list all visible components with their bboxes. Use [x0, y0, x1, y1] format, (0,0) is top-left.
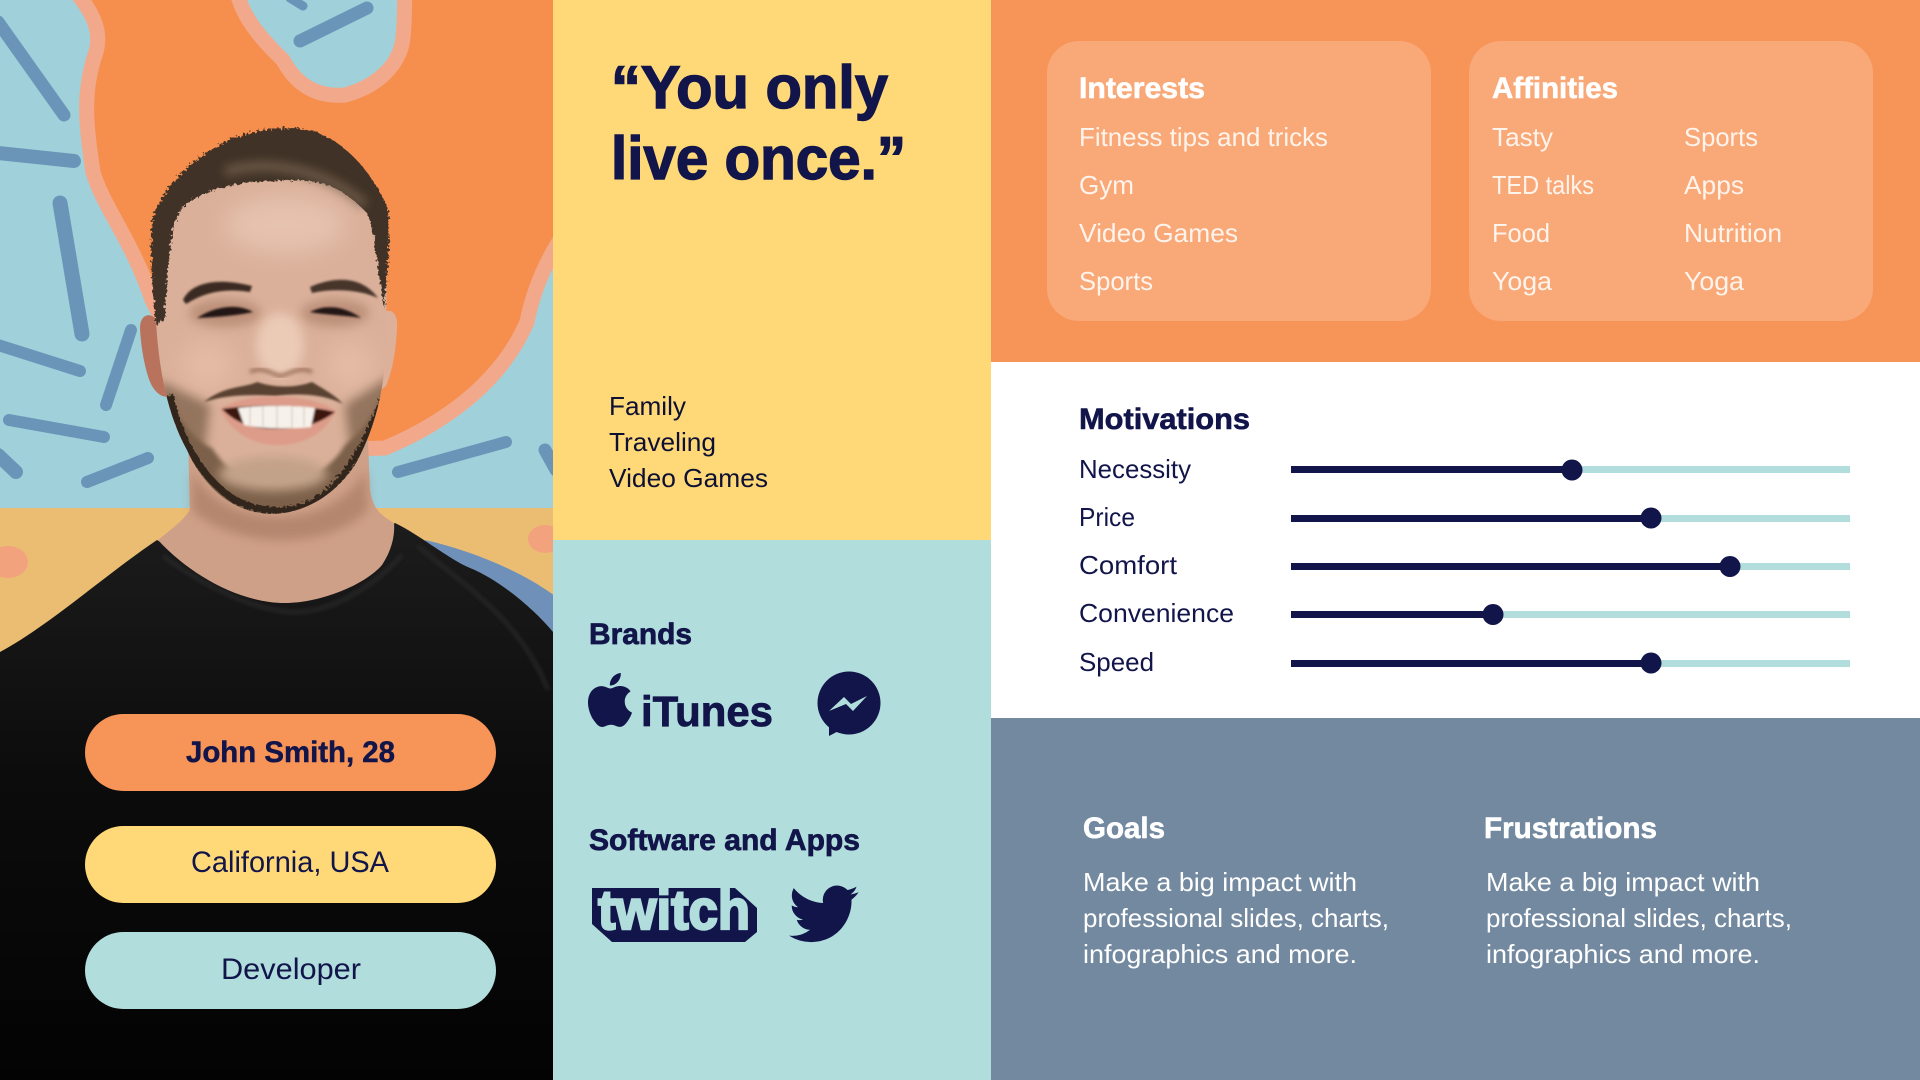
nose: [250, 313, 312, 377]
affinities list: Sports: [1684, 122, 1758, 152]
interests list: [1079, 122, 1328, 296]
interests list: Fitness tips and tricks: [1079, 122, 1328, 152]
interests list: Video Games: [1079, 218, 1238, 248]
hair light: [225, 166, 365, 205]
blue painted sticks: [0, 0, 556, 482]
quote heading: live once.”: [611, 125, 906, 192]
heading: affinities: Affinities: [1492, 72, 1618, 105]
affinities list: Apps: [1684, 170, 1744, 200]
heading: brands: Brands: [589, 618, 692, 651]
sand floor band: [0, 508, 553, 652]
blob cut-out: [237, 0, 405, 95]
slider: necessity: [1079, 454, 1850, 484]
heading: software and apps: Software and Apps: [589, 824, 860, 857]
frustrations text: infographics and more.: [1486, 939, 1760, 969]
pill: location: [85, 826, 496, 903]
panel: portrait photo: [0, 0, 565, 1080]
forehead light: [225, 197, 345, 253]
pink floor spots: [0, 525, 562, 578]
neck shadow: [192, 470, 368, 540]
heading: goals: Goals: [1083, 812, 1165, 845]
slider: price: [1079, 502, 1850, 532]
beard: [167, 398, 380, 514]
mustache: [204, 382, 343, 404]
neck: [158, 440, 394, 603]
affinities list: Tasty: [1492, 122, 1553, 152]
slider: speed: Speed: [1079, 647, 1154, 677]
eye left: [197, 307, 253, 318]
eyebrow left: [183, 282, 252, 304]
panel: motivations: [991, 362, 1920, 718]
frustrations text: professional slides, charts,: [1486, 903, 1792, 933]
pill: name: [85, 714, 496, 791]
hobbies list: Traveling: [609, 427, 716, 457]
heading: motivations: Motivations: [1079, 403, 1250, 436]
orange painted blob: [76, 0, 565, 450]
wall background: [0, 0, 553, 510]
slider: convenience: Convenience: [1079, 598, 1234, 628]
panel: affinities card: [1469, 41, 1873, 321]
face: [154, 179, 386, 468]
left ear: [140, 315, 166, 397]
panel: brands and apps: [553, 540, 991, 1080]
hobbies list: Video Games: [609, 463, 768, 493]
hobbies list: Family: [609, 391, 686, 421]
panel: goals and frustrations: [991, 718, 1920, 1080]
panel: interests card: [1047, 41, 1431, 321]
slider: comfort: Comfort: [1079, 550, 1178, 580]
pill: name: John Smith, 28: [186, 736, 395, 769]
pill: job: Developer: [221, 953, 361, 986]
goals text: infographics and more.: [1083, 939, 1357, 969]
eye sockets: [189, 299, 369, 327]
pill: location: California, USA: [191, 846, 389, 879]
icon: itunes logo: iTunes: [641, 688, 773, 736]
slider: price: Price: [1079, 502, 1135, 532]
heading: interests: Interests: [1079, 72, 1205, 105]
chin beard lighter: [219, 457, 327, 491]
frustrations text: Make a big impact with: [1486, 867, 1760, 897]
jaw dark edge: [170, 395, 383, 511]
goals text: Make a big impact with: [1083, 867, 1357, 897]
icon: twitter bird: [789, 886, 859, 942]
slider: comfort: [1079, 550, 1850, 580]
slider: convenience: [1079, 598, 1850, 628]
slider: necessity: Necessity: [1079, 454, 1191, 484]
right ear: [382, 310, 398, 390]
affinities list: Nutrition: [1684, 218, 1782, 248]
cheek stubble: [163, 374, 384, 459]
goals text: professional slides, charts,: [1083, 903, 1389, 933]
pill: job: [85, 932, 496, 1009]
mouth: [220, 396, 336, 445]
interests list: Sports: [1079, 266, 1153, 296]
eye right: [310, 307, 361, 318]
heading: frustrations: Frustrations: [1484, 812, 1657, 845]
quote heading: “You only: [611, 54, 889, 121]
affinities list: Yoga: [1684, 266, 1745, 296]
interests list: Gym: [1079, 170, 1134, 200]
hair: [151, 128, 389, 325]
icon: itunes logo: [588, 673, 773, 736]
eyebrow right: [310, 280, 378, 298]
panel: quote background: [553, 0, 991, 541]
affinities list: [1492, 122, 1782, 296]
affinities list: Food: [1492, 218, 1550, 248]
hobbies list: [609, 391, 768, 493]
icon: messenger: [818, 672, 880, 736]
cheek tones: [192, 350, 364, 380]
affinities list: Yoga: [1492, 266, 1553, 296]
shirt highlights: [163, 546, 548, 690]
panel: orange interests background: [991, 0, 1920, 362]
slider: speed: [1079, 647, 1850, 677]
blue arc: [425, 540, 553, 632]
shirt: [0, 523, 553, 1080]
affinities list: TED talks: [1492, 170, 1594, 200]
icon: twitch logo: twitch: [598, 878, 750, 941]
